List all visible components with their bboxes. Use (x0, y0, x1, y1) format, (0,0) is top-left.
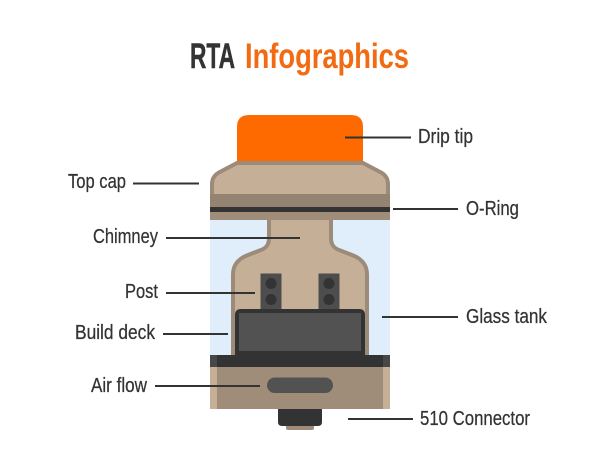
label: Post (125, 281, 255, 303)
510 connector tip (286, 425, 314, 430)
label: Build deck: Build deck (75, 322, 156, 344)
label: Glass tank: Glass tank (466, 306, 548, 328)
label: O-Ring (393, 198, 519, 220)
label: O-Ring: O-Ring (466, 198, 519, 220)
o-ring (210, 207, 390, 212)
post right (318, 274, 340, 312)
RTA tank diagram (210, 115, 390, 430)
air flow slot (267, 378, 333, 393)
title: RTA (190, 37, 235, 76)
glass tank (210, 220, 390, 356)
top cap bottom band (210, 212, 390, 220)
label: Chimney: Chimney (93, 226, 158, 248)
label: Drip tip (345, 126, 473, 148)
drip tip (237, 115, 363, 162)
top cap (212, 163, 388, 196)
label: Drip tip: Drip tip (418, 126, 473, 148)
deck band (210, 355, 390, 367)
label: Air flow: Air flow (91, 375, 147, 397)
label: 510 Connector: 510 Connector (420, 408, 530, 430)
label: Top cap (68, 171, 199, 193)
build deck inner panel (239, 313, 361, 351)
build deck (235, 309, 365, 356)
title (190, 37, 409, 76)
deck band ends (210, 355, 390, 367)
base (210, 367, 390, 409)
base side highlights (210, 367, 390, 409)
title: Infographics (245, 37, 409, 76)
top cap lower band (210, 194, 390, 207)
label: Post: Post (125, 281, 158, 303)
post left (260, 274, 282, 312)
510 connector (278, 409, 322, 426)
chimney and chamber (233, 218, 367, 356)
label: Top cap: Top cap (68, 171, 126, 193)
